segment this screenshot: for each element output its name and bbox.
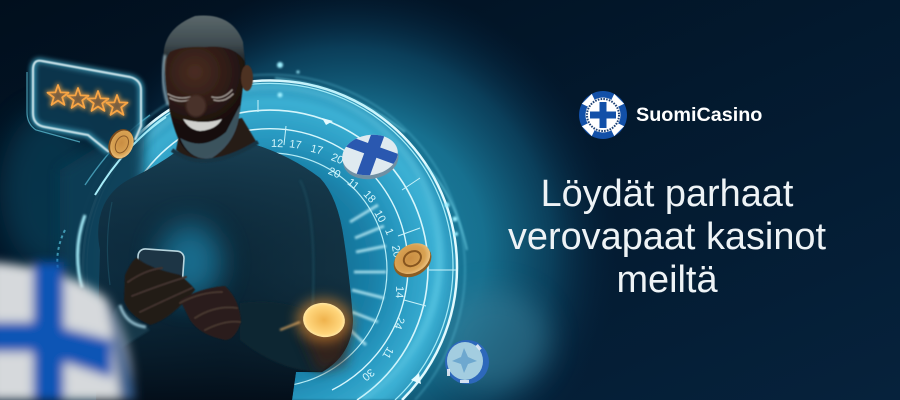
icon: blurred Finnish flag chip foreground [0,262,136,400]
roulette wheel: 20 [326,165,342,181]
icon: glowing gold coin on sleeve [280,298,352,342]
roulette wheel: 17 [309,143,324,157]
icon: four stars [48,85,128,115]
headline: Löydät parhaat [541,173,793,215]
eyes and nose [168,90,233,101]
icon: gold coin near bubble [104,125,138,163]
roulette wheel: 14 [393,286,405,298]
wheel spokes [346,205,386,345]
roulette wheel: 18 [361,188,378,206]
roulette wheel: 20 [389,244,403,259]
ear [241,65,253,91]
roulette wheel: 11 [345,176,361,193]
roulette wheel: 30 [359,366,376,383]
speech bubble with stars [27,61,142,158]
beard [180,105,240,159]
icon: blue Finnish chip top [342,134,398,180]
roulette wheel: 12 [271,138,283,150]
logo: SuomiCasino chip [579,91,627,139]
roulette wheel: 17 [289,138,302,152]
logo wordmark: SuomiCasino [636,104,762,126]
roulette wheel [57,62,467,400]
headline [508,173,826,301]
smile [183,119,222,131]
roulette wheel: 10 [371,208,388,225]
phone in hands [124,248,241,340]
roulette wheel: 24 [391,315,407,331]
roulette wheel: 1 [382,227,395,237]
man: neck and head [163,16,258,161]
head [164,17,245,158]
roulette wheel: 11 [379,345,396,361]
icon: blue white chip bottom [445,340,489,384]
headline: verovapaat kasinot [508,216,826,258]
hair [164,16,245,62]
man: sweater and arms [96,143,353,400]
headline: meiltä [616,259,718,301]
roulette wheel: 20 [329,151,345,167]
icon: gold coin on wheel [387,237,437,284]
